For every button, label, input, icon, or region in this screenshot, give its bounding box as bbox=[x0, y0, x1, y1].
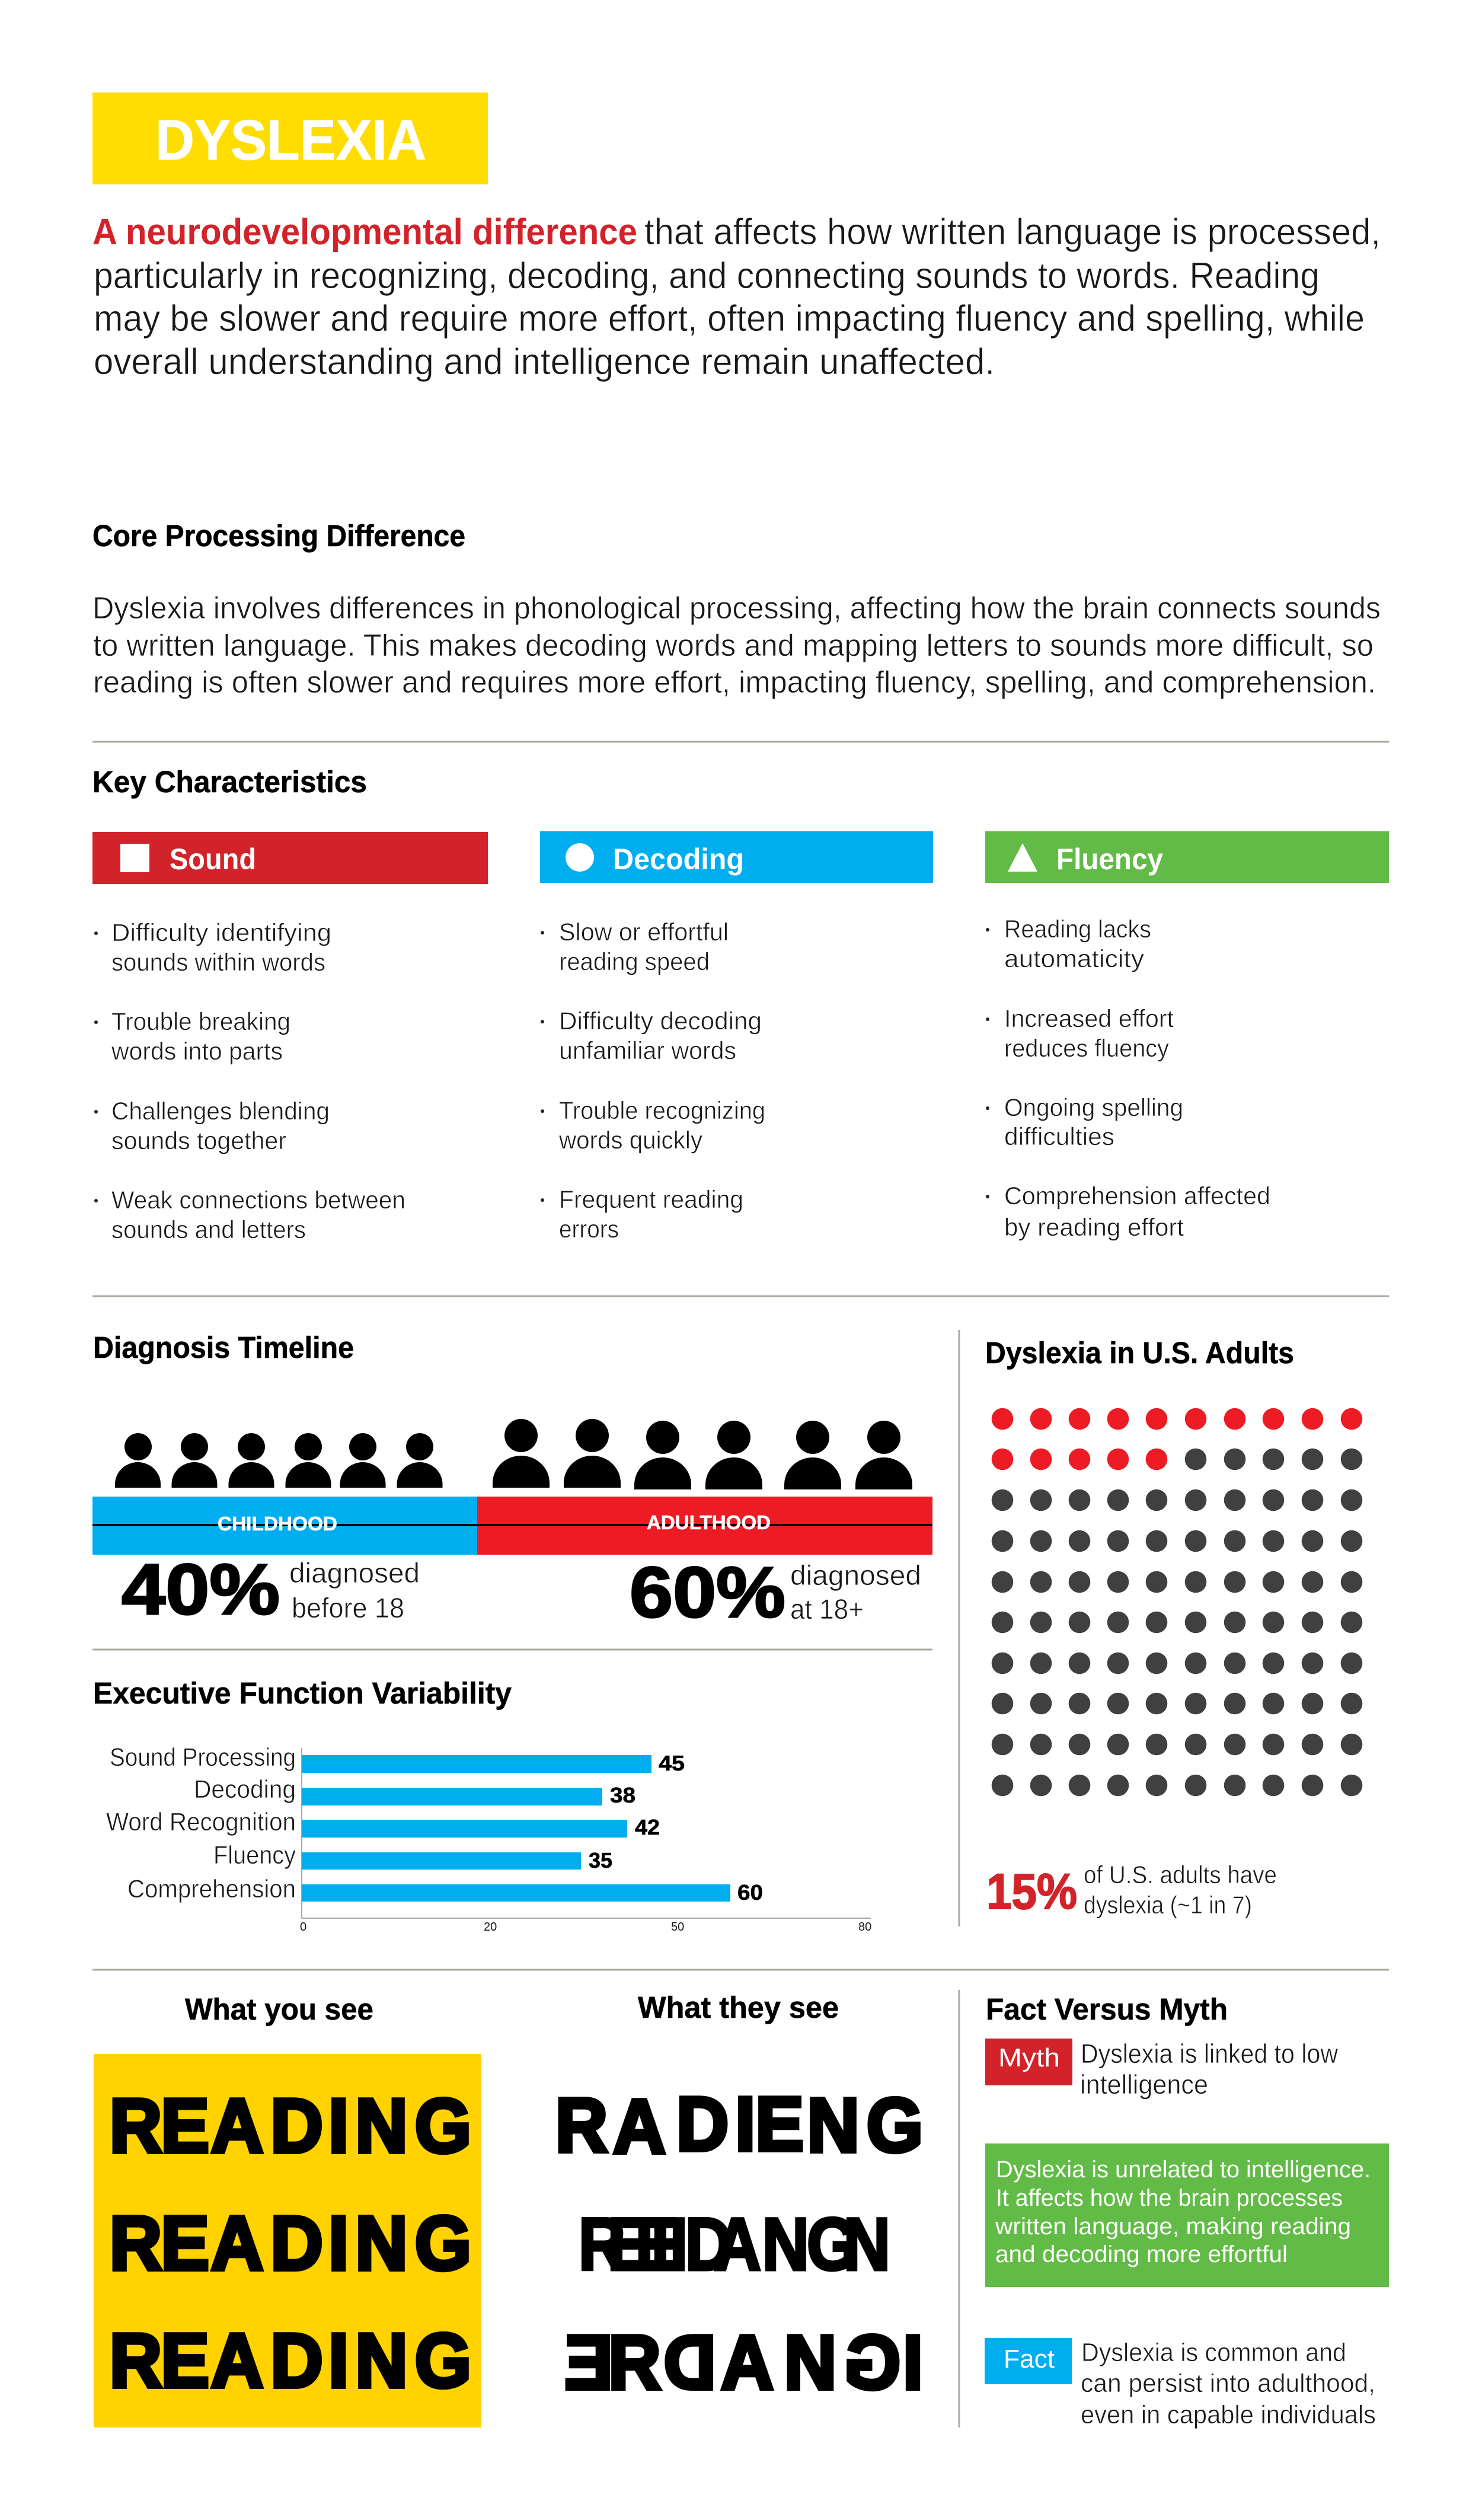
chart axis ticks: 80 bbox=[858, 1921, 871, 1934]
fact tag bbox=[985, 2338, 1072, 2384]
stat: 40 percent: diagnosed bbox=[289, 1557, 420, 1588]
chart axis ticks: 20 bbox=[484, 1921, 497, 1934]
chart values: 35 bbox=[589, 1848, 612, 1873]
timeline bar: CHILDHOOD bbox=[218, 1513, 337, 1535]
chart category labels: Word Recognition bbox=[106, 1808, 296, 1836]
fact statement: can persist into adulthood, bbox=[1081, 2369, 1375, 2398]
icon group: adults bbox=[493, 1419, 912, 1489]
intro text block: A neurodevelopmental difference bbox=[92, 212, 637, 253]
core processing paragraph: to written language. This makes decoding words and mapping letters to sounds more difficult, so bbox=[93, 629, 1374, 663]
chart category labels: Fluency bbox=[213, 1841, 296, 1870]
chart axis ticks: 50 bbox=[671, 1921, 684, 1934]
scrambled word: mirrored letters: A bbox=[721, 2320, 774, 2405]
green callout: and decoding more effortful bbox=[995, 2241, 1288, 2267]
core processing paragraph: Dyslexia involves differences in phonological processing, affecting how the brain connects sounds bbox=[92, 591, 1381, 626]
core processing paragraph: reading is often slower and requires more effort, impacting fluency, spelling, and comprehension. bbox=[93, 665, 1376, 700]
timeline bar: ADULTHOOD bbox=[647, 1511, 771, 1533]
intro text block: may be slower and require more effort, often impacting fluency and spelling, while bbox=[94, 298, 1365, 339]
stat: 15 percent: dyslexia (~1 in 7) bbox=[1084, 1891, 1252, 1919]
fact tag: Fact bbox=[1004, 2344, 1055, 2374]
panel: what you see: READING bbox=[110, 2200, 471, 2286]
stat: 60 percent: diagnosed bbox=[790, 1559, 921, 1591]
fluency bullet list: difficulties bbox=[1004, 1122, 1114, 1150]
decoding bullet list: reading speed bbox=[559, 948, 710, 975]
stat: 60 percent: 60% bbox=[630, 1552, 785, 1632]
decoding bullet list: Slow or effortful bbox=[559, 918, 729, 946]
scrambled word: mirrored letters: D bbox=[663, 2320, 716, 2405]
heading: executive function variability: Executive Function Variability bbox=[93, 1676, 512, 1710]
fluency bullet list: by reading effort bbox=[1004, 1213, 1184, 1241]
decoding bullet list: Trouble recognizing bbox=[559, 1096, 765, 1124]
chart values: 42 bbox=[635, 1815, 660, 1839]
fluency bullet list: Comprehension affected bbox=[1004, 1182, 1270, 1210]
chart values bbox=[589, 1751, 763, 1905]
fluency bullet list bbox=[986, 915, 1270, 1241]
green callout: It affects how the brain processes bbox=[996, 2185, 1343, 2211]
fact statement: Dyslexia is common and bbox=[1081, 2338, 1346, 2367]
heading: what they see: What they see bbox=[638, 1991, 839, 2024]
scrambled word: crowded letters: REEIIDANGN bbox=[579, 2202, 890, 2286]
decoding bullet list: words quickly bbox=[558, 1126, 702, 1154]
sound bullet list: Challenges blending bbox=[111, 1097, 330, 1125]
sound bullet list bbox=[94, 918, 405, 1243]
green callout: written language, making reading bbox=[995, 2213, 1351, 2240]
heading: fact versus myth: Fact Versus Myth bbox=[986, 1992, 1228, 2026]
stat: 40 percent: 40% bbox=[122, 1549, 280, 1629]
chart category labels: Comprehension bbox=[127, 1875, 296, 1903]
panel: fluency bbox=[985, 831, 1389, 1241]
decoding header bbox=[540, 831, 933, 883]
intro text block: particularly in recognizing, decoding, and connecting sounds to words. Reading bbox=[94, 256, 1320, 296]
scrambled word: mirrored letters bbox=[564, 2320, 923, 2405]
decoding bullet list: Difficulty decoding bbox=[559, 1007, 762, 1035]
scrambled word: mirrored letters: E bbox=[564, 2320, 613, 2405]
sound bullet list: sounds and letters bbox=[111, 1216, 306, 1243]
sound bullet list: Difficulty identifying bbox=[111, 918, 331, 946]
sound bullet list: Trouble breaking bbox=[111, 1007, 290, 1035]
fluency bullet list: Increased effort bbox=[1004, 1004, 1174, 1032]
chart category labels bbox=[106, 1743, 296, 1903]
panel: decoding bbox=[540, 831, 933, 1243]
green callout bbox=[985, 2143, 1389, 2287]
stat: 15 percent bbox=[986, 1861, 1277, 1919]
stat: 15 percent: 15% bbox=[986, 1864, 1077, 1919]
fluency bullet list: reduces fluency bbox=[1004, 1034, 1169, 1062]
fluency header: Fluency bbox=[1056, 843, 1163, 876]
fact statement: even in capable individuals bbox=[1081, 2400, 1376, 2429]
chart bars bbox=[302, 1755, 730, 1902]
panel: sound bbox=[92, 832, 488, 1243]
heading: diagnosis timeline: Diagnosis Timeline bbox=[93, 1331, 354, 1364]
myth tag: Myth bbox=[998, 2043, 1060, 2072]
panel: what they see bbox=[555, 2081, 923, 2405]
title banner: DYSLEXIA bbox=[155, 109, 426, 172]
myth tag bbox=[985, 2039, 1072, 2085]
stat: 60 percent: at 18+ bbox=[790, 1593, 864, 1625]
stat: 60 percent bbox=[630, 1552, 921, 1632]
scrambled word: mirrored letters: N bbox=[784, 2320, 836, 2405]
sound bullet list: words into parts bbox=[111, 1037, 283, 1065]
fluency header bbox=[985, 831, 1389, 883]
panel: what you see bbox=[94, 2054, 481, 2428]
stat: 15 percent: of U.S. adults have bbox=[1084, 1861, 1277, 1889]
heading: core processing difference: Core Processing Difference bbox=[92, 519, 465, 553]
scrambled word: mirrored letters: R bbox=[608, 2320, 661, 2405]
core processing paragraph bbox=[92, 591, 1381, 700]
decoding bullet list: Frequent reading bbox=[559, 1185, 743, 1213]
chart values: 45 bbox=[659, 1751, 685, 1775]
scrambled word: mirrored letters: G bbox=[844, 2320, 900, 2405]
sound bullet list: sounds together bbox=[111, 1127, 286, 1154]
scrambled word: mirrored letters: I bbox=[903, 2320, 923, 2405]
title banner bbox=[92, 92, 488, 184]
bar chart: executive function bbox=[106, 1743, 871, 1934]
fluency bullet list: Reading lacks bbox=[1004, 915, 1151, 943]
chart category labels: Decoding bbox=[194, 1775, 296, 1804]
chart axis ticks: 0 bbox=[300, 1921, 306, 1934]
heading: what you see: What you see bbox=[185, 1992, 373, 2026]
fluency bullet list: automaticity bbox=[1004, 945, 1144, 972]
icon group: children bbox=[115, 1433, 442, 1488]
sound header bbox=[92, 832, 488, 884]
chart values: 60 bbox=[737, 1880, 763, 1905]
intro text block: overall understanding and intelligence remain unaffected. bbox=[94, 342, 995, 382]
panel: what you see: READING bbox=[110, 2083, 471, 2168]
timeline bar bbox=[92, 1497, 932, 1555]
stat: 40 percent: before 18 bbox=[292, 1592, 404, 1623]
decoding bullet list: errors bbox=[559, 1215, 619, 1243]
chart category labels: Sound Processing bbox=[110, 1743, 296, 1772]
sound bullet list: sounds within words bbox=[111, 948, 325, 976]
chart axis ticks bbox=[300, 1921, 871, 1934]
intro text block bbox=[92, 212, 1381, 382]
dot matrix: 15 of 100 bbox=[992, 1408, 1362, 1796]
fluency bullet list: Ongoing spelling bbox=[1004, 1093, 1183, 1121]
chart values: 38 bbox=[610, 1783, 635, 1807]
decoding bullet list: unfamiliar words bbox=[559, 1036, 736, 1064]
sound bullet list: Weak connections between bbox=[111, 1186, 405, 1214]
decoding bullet list bbox=[541, 918, 765, 1243]
intro text block: that affects how written language is processed, bbox=[644, 212, 1381, 253]
decoding header: Decoding bbox=[613, 843, 744, 876]
scrambled word: radieng: RADIENG bbox=[555, 2081, 923, 2169]
stat: 40 percent bbox=[122, 1549, 420, 1629]
sound header: Sound bbox=[170, 843, 256, 876]
heading: dyslexia in U.S. adults: Dyslexia in U.S. Adults bbox=[985, 1336, 1294, 1370]
heading: key characteristics: Key Characteristics bbox=[92, 765, 367, 799]
myth statement: intelligence bbox=[1080, 2069, 1208, 2100]
fact statement bbox=[1081, 2338, 1376, 2429]
green callout: Dyslexia is unrelated to intelligence. bbox=[996, 2157, 1371, 2183]
myth statement bbox=[1080, 2039, 1338, 2100]
myth statement: Dyslexia is linked to low bbox=[1081, 2039, 1338, 2069]
panel: what you see: READING bbox=[110, 2318, 471, 2403]
